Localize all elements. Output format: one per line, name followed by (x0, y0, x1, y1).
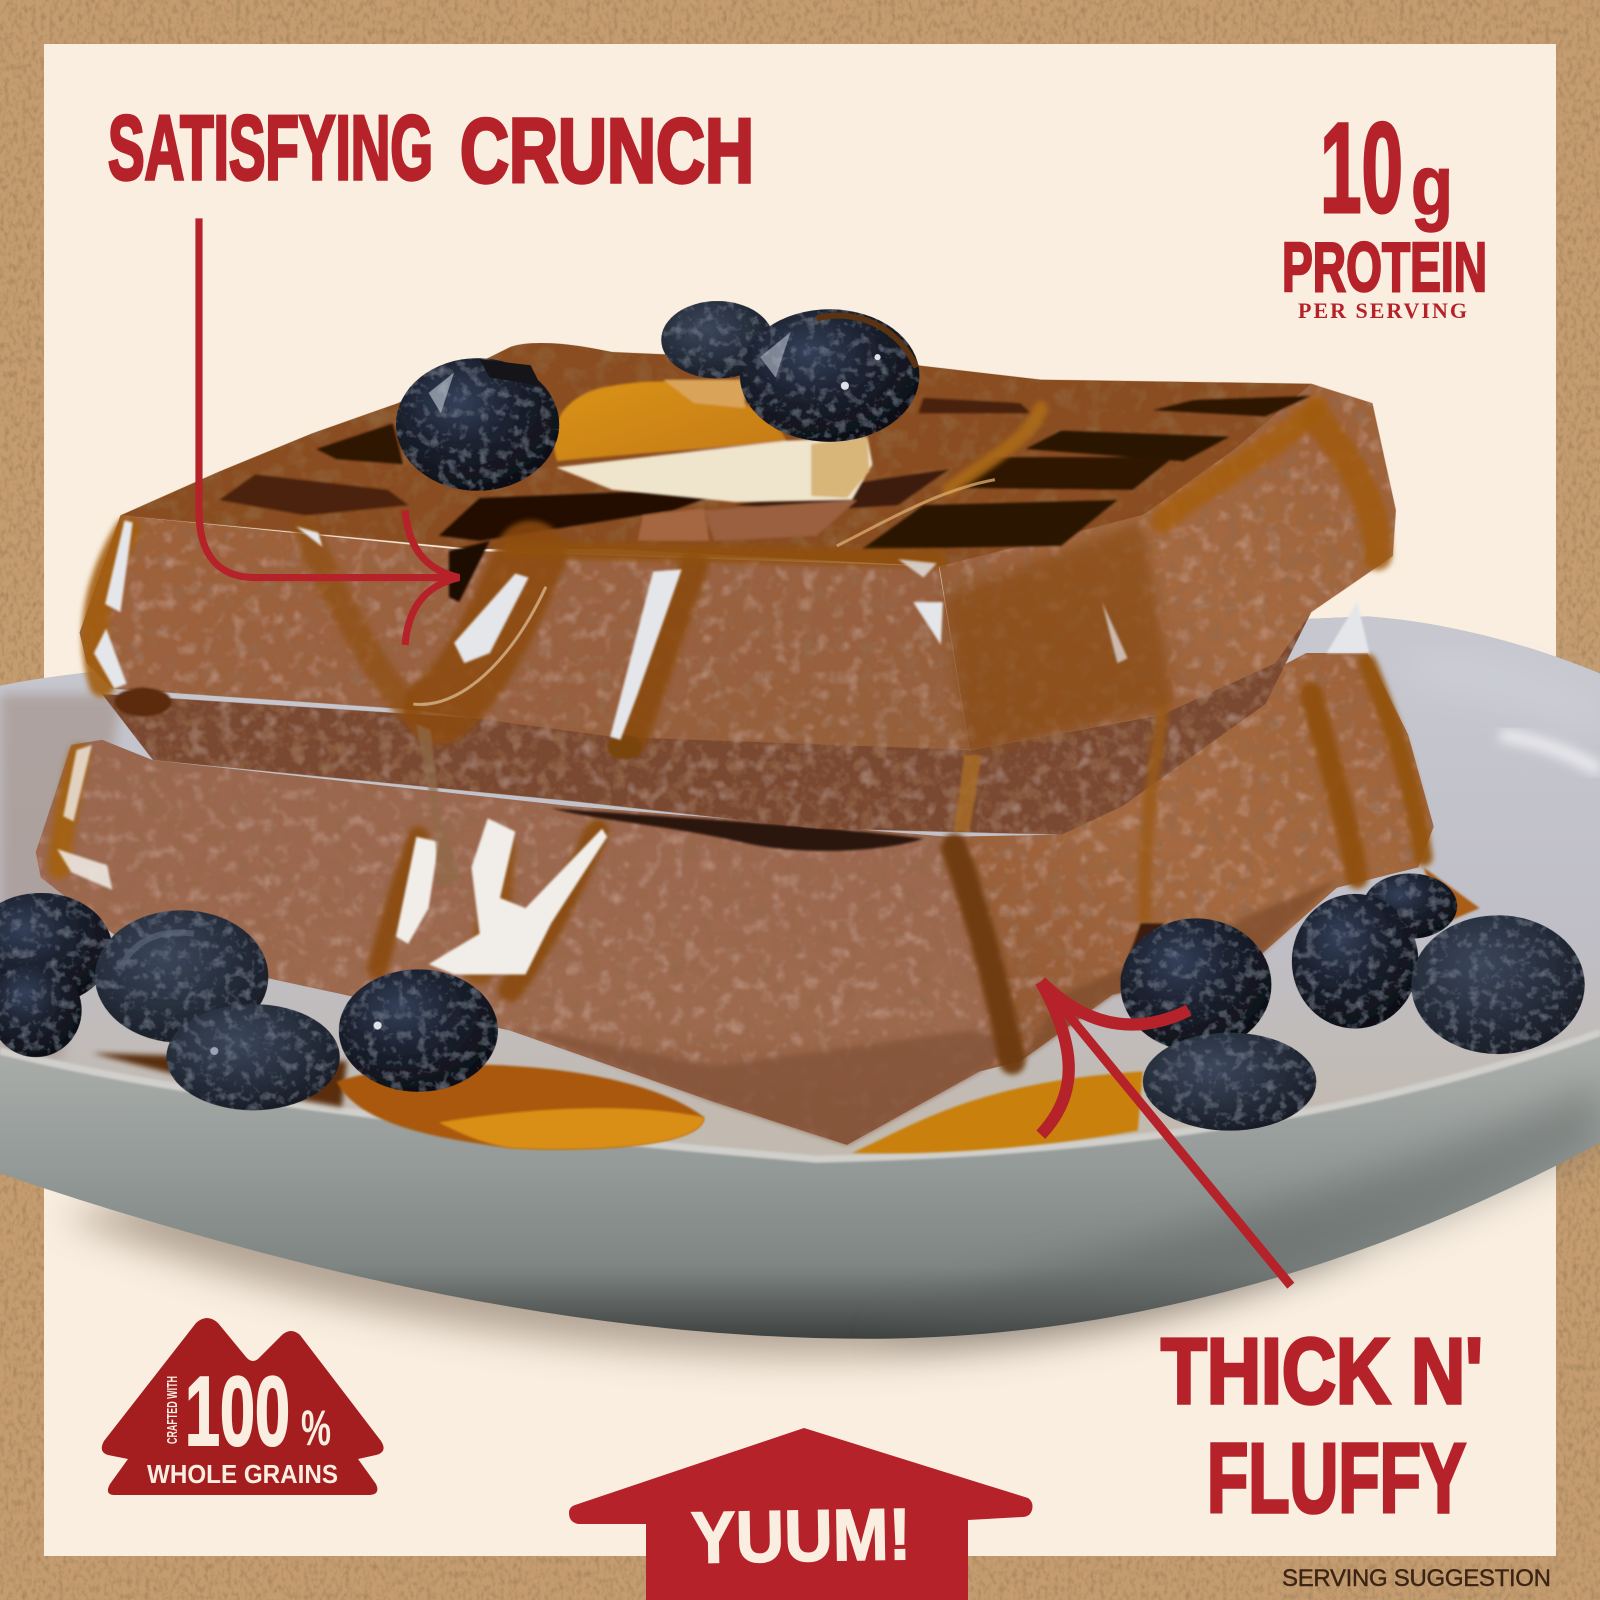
top waffle (80, 343, 1396, 980)
stat: 10g protein per serving: 10 (1320, 97, 1403, 240)
badge text: WHOLE GRAINS (147, 1459, 338, 1489)
syrup pools on plate (92, 867, 1480, 1153)
bottom waffle (36, 653, 1434, 1145)
gloss highlights bottom waffle (57, 745, 607, 974)
heading: thick n' fluffy: FLUFFY (1207, 1423, 1466, 1533)
syrup on top waffle (95, 408, 1378, 923)
heading: satisfying crunch: CRUNCH (460, 101, 754, 202)
blueberry top left (396, 358, 559, 491)
badge: 100% whole grains (102, 1318, 384, 1495)
butter with syrup (554, 380, 872, 502)
syrup on bottom waffle (59, 663, 1423, 1061)
up arrow shape (569, 1428, 1032, 1600)
badge text: 100 (185, 1356, 290, 1466)
badge text: CRAFTED WITH (164, 1376, 181, 1444)
heading: thick n' fluffy (1161, 1319, 1483, 1533)
blueberries (0, 301, 1585, 1131)
stat: 10g protein per serving: PROTEIN (1282, 228, 1487, 306)
blueberries right group (1120, 873, 1585, 1131)
syrup coated corner (944, 520, 1173, 753)
badge text (147, 1356, 338, 1489)
arrow badge: yuum (569, 1428, 1032, 1600)
stat: 10g protein per serving (1282, 97, 1487, 323)
serving suggestion note: SERVING SUGGESTION (1282, 1565, 1551, 1592)
stat: 10g protein per serving: g (1411, 138, 1453, 232)
gloss highlights top waffle (94, 520, 1369, 740)
badge mountain shape (102, 1318, 384, 1495)
waffle photo (0, 218, 1600, 1356)
yuum label: YUUM! (690, 1494, 912, 1579)
heading: thick n' fluffy: THICK N' (1161, 1319, 1483, 1423)
blueberry top right (740, 309, 919, 442)
drips (114, 688, 1163, 980)
badge text: % (301, 1400, 331, 1456)
arrow: satisfying crunch pointer (199, 218, 459, 645)
stat: 10g protein per serving: PER SERVING (1298, 298, 1467, 323)
plate shadow (61, 1173, 1367, 1356)
heading: satisfying crunch: SATISFYING (108, 98, 433, 199)
waffle top grid wells (219, 396, 1311, 602)
blueberry back top (661, 301, 773, 379)
arrow: thick and fluffy pointer (1041, 982, 1291, 1286)
blueberries left group (0, 893, 498, 1110)
plate (0, 616, 1600, 1339)
